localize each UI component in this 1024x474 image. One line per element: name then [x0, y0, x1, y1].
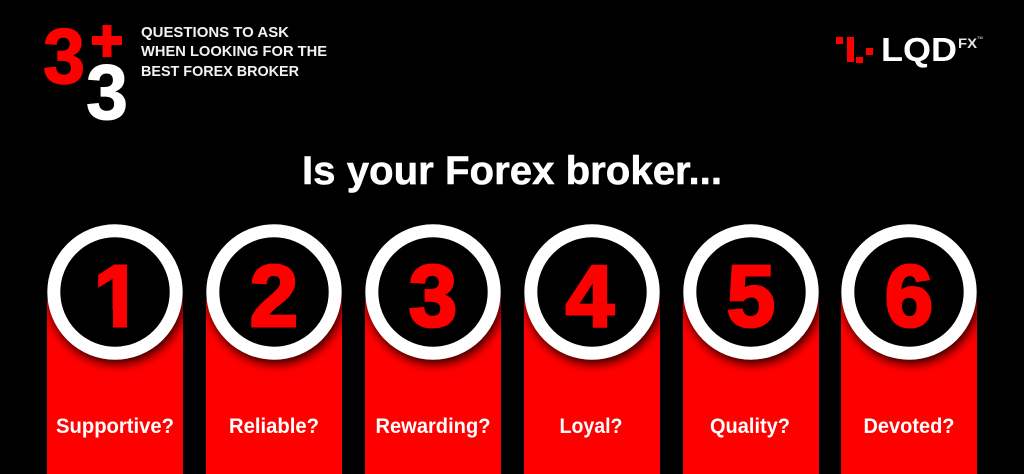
card 1: Supportive: 1: [94, 248, 142, 345]
LQDFX logo: LQD: [881, 31, 957, 68]
card 5: Quality: [683, 228, 821, 474]
card 4: Loyal: [524, 228, 662, 474]
header text: WHEN LOOKING FOR THE: [141, 43, 327, 60]
card 6: Devoted: Devoted?: [864, 414, 954, 438]
main heading: Is your Forex broker...: [302, 149, 722, 193]
card 5: Quality: Quality?: [710, 414, 790, 438]
card 3: Rewarding: [365, 228, 503, 474]
3+3 logo mark: 3: [86, 48, 128, 136]
card 2: Reliable: Reliable?: [229, 414, 319, 438]
card 5: Quality: 5: [727, 248, 775, 345]
card 3: Rewarding: Rewarding?: [376, 414, 490, 438]
LQDFX logo: [836, 31, 983, 68]
header text: QUESTIONS TO ASK: [141, 24, 289, 41]
3+3 logo mark: [43, 12, 128, 136]
3+3 logo mark: 3: [43, 12, 85, 100]
header text: BEST FOREX BROKER: [141, 63, 299, 80]
card 1: Supportive: [47, 228, 185, 474]
header text: [141, 24, 327, 80]
card 6: Devoted: 6: [885, 248, 933, 345]
card 3: Rewarding: 3: [409, 248, 457, 345]
LQDFX logo: FX: [958, 35, 978, 51]
card 1: Supportive: Supportive?: [56, 414, 174, 438]
card 6: Devoted: [841, 228, 979, 474]
LQDFX logo: TM: [977, 35, 983, 40]
card 4: Loyal: 4: [566, 248, 614, 345]
card 4: Loyal: Loyal?: [560, 414, 622, 438]
card 2: Reliable: [206, 228, 344, 474]
card 2: Reliable: 2: [250, 248, 298, 345]
